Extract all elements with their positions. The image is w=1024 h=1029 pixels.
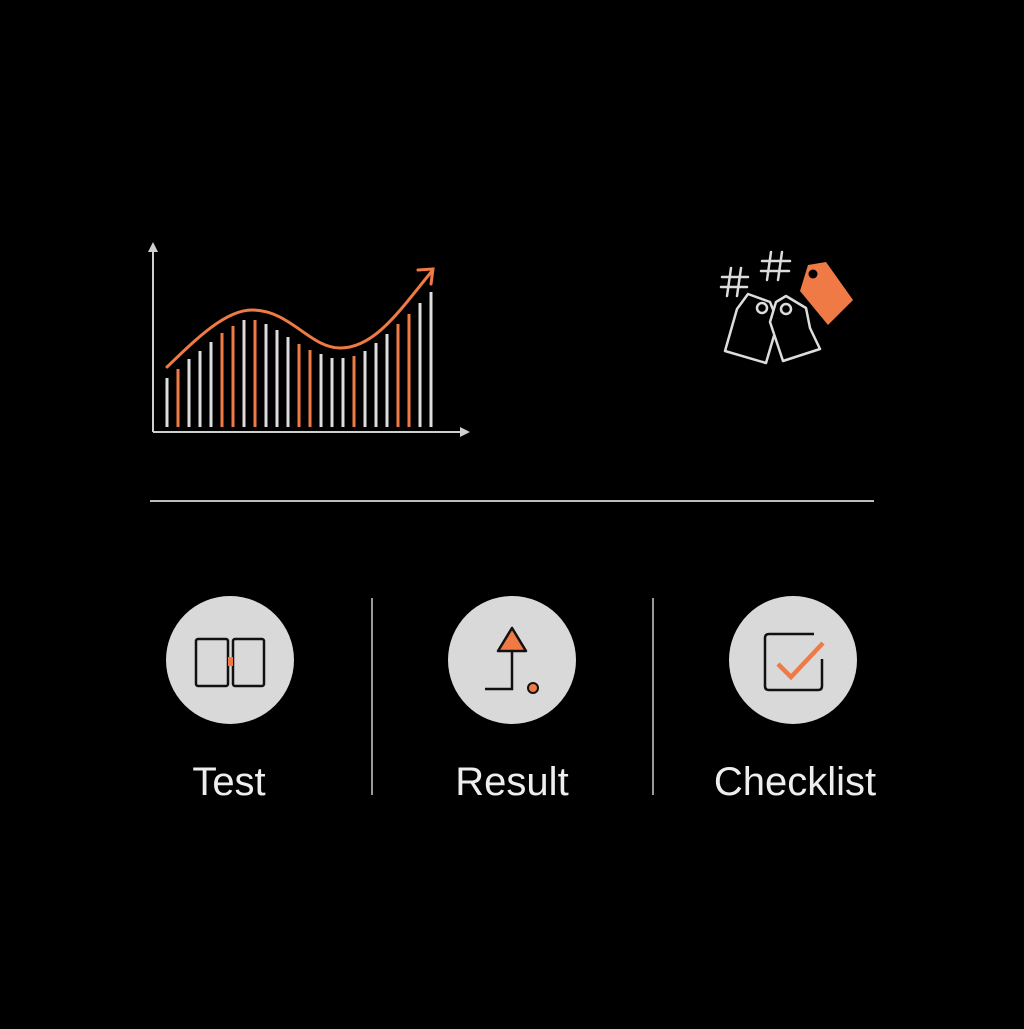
divider line [150, 500, 874, 502]
x axis [153, 427, 470, 437]
item: Checklist: Checklist [714, 760, 876, 804]
item: Test: Test [192, 760, 266, 804]
outline tags [725, 294, 820, 363]
icon: hashtags and tags [721, 252, 853, 363]
item: Checklist [714, 596, 876, 804]
chart: rising trend bar chart [148, 242, 470, 437]
item: Result: Result [455, 760, 569, 804]
trend curve arrow [167, 269, 433, 367]
bars [167, 292, 431, 427]
column dividers [372, 598, 653, 795]
orange tag [800, 262, 853, 325]
item: Test [166, 596, 294, 804]
item: Result [448, 596, 576, 804]
y axis [148, 242, 158, 432]
hashtags [721, 252, 790, 296]
